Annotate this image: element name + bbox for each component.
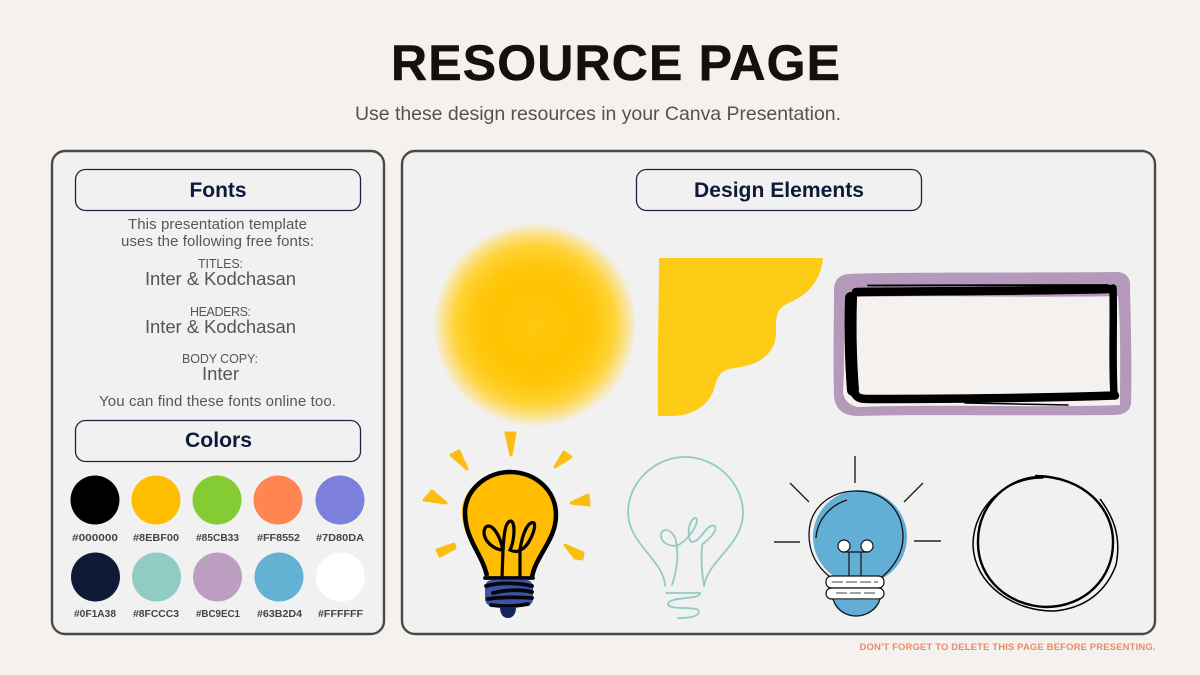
swatch: green: #85CB33 [196, 533, 239, 544]
swatch: sky blue: #63B2D4 [257, 609, 302, 620]
swatch: black [70, 476, 120, 544]
text block: headers font [145, 305, 296, 337]
heading: design elements [636, 170, 922, 210]
panel: design elements [402, 151, 1155, 634]
element: yellow blob shape [658, 258, 823, 416]
swatch: black: #000000 [72, 533, 119, 544]
text block: fonts intro: uses the following free fonts: [121, 233, 314, 250]
swatch: yellow: #8EBF00 [133, 533, 179, 544]
swatch: teal [132, 552, 181, 620]
text block: fonts note: You can find these fonts online too. [99, 393, 336, 410]
heading: colors [76, 420, 360, 462]
swatch: orange: #FF8552 [257, 533, 300, 544]
heading: fonts [76, 170, 360, 210]
icon: teal outline light bulb [628, 457, 743, 618]
text block: body copy font: BODY COPY: [182, 352, 258, 366]
element: brushed frame [834, 272, 1131, 416]
bulb rays [774, 456, 941, 542]
heading: design elements: Design Elements [694, 179, 864, 202]
swatch: white [316, 552, 365, 620]
title: RESOURCE PAGE [391, 35, 840, 91]
color swatches [70, 476, 365, 620]
text block: body copy font: Inter [202, 363, 239, 384]
swatch: orange [254, 476, 302, 544]
element: glowing sun [433, 223, 637, 427]
text block: titles font [145, 257, 296, 289]
icon: yellow light bulb [424, 433, 589, 618]
text block: titles font: TITLES: [198, 257, 243, 271]
text block: body copy font [182, 352, 258, 384]
swatch: sky blue [254, 552, 304, 620]
swatch: periwinkle: #7D80DA [316, 533, 364, 544]
text block: headers font: HEADERS: [190, 305, 251, 319]
swatch: lilac [193, 552, 242, 620]
swatch: periwinkle [316, 476, 364, 544]
icon: blue light bulb [774, 456, 941, 616]
swatch: yellow [132, 476, 180, 544]
swatch: white: #FFFFFF [318, 609, 363, 620]
subtitle: Use these design resources in your Canva Presentation. [355, 103, 841, 125]
footer note: DON'T FORGET TO DELETE THIS PAGE BEFORE PRESENTING. [860, 642, 1156, 653]
swatch: green [192, 476, 242, 544]
swatch: teal: #8FCCC3 [133, 609, 179, 620]
bulb rays [424, 433, 589, 559]
heading: colors: Colors [185, 429, 252, 452]
text block: headers font: Inter & Kodchasan [145, 316, 296, 337]
panel: fonts and colors [52, 151, 384, 634]
text block: fonts intro [121, 216, 314, 250]
text block: fonts intro: This presentation template [128, 216, 307, 233]
swatch: lilac: #BC9EC1 [196, 609, 240, 620]
text block: titles font: Inter & Kodchasan [145, 268, 296, 289]
element: hand drawn circle [973, 476, 1118, 611]
heading: fonts: Fonts [190, 179, 246, 202]
swatch: navy: #0F1A38 [74, 609, 116, 620]
swatch: navy [71, 552, 120, 620]
